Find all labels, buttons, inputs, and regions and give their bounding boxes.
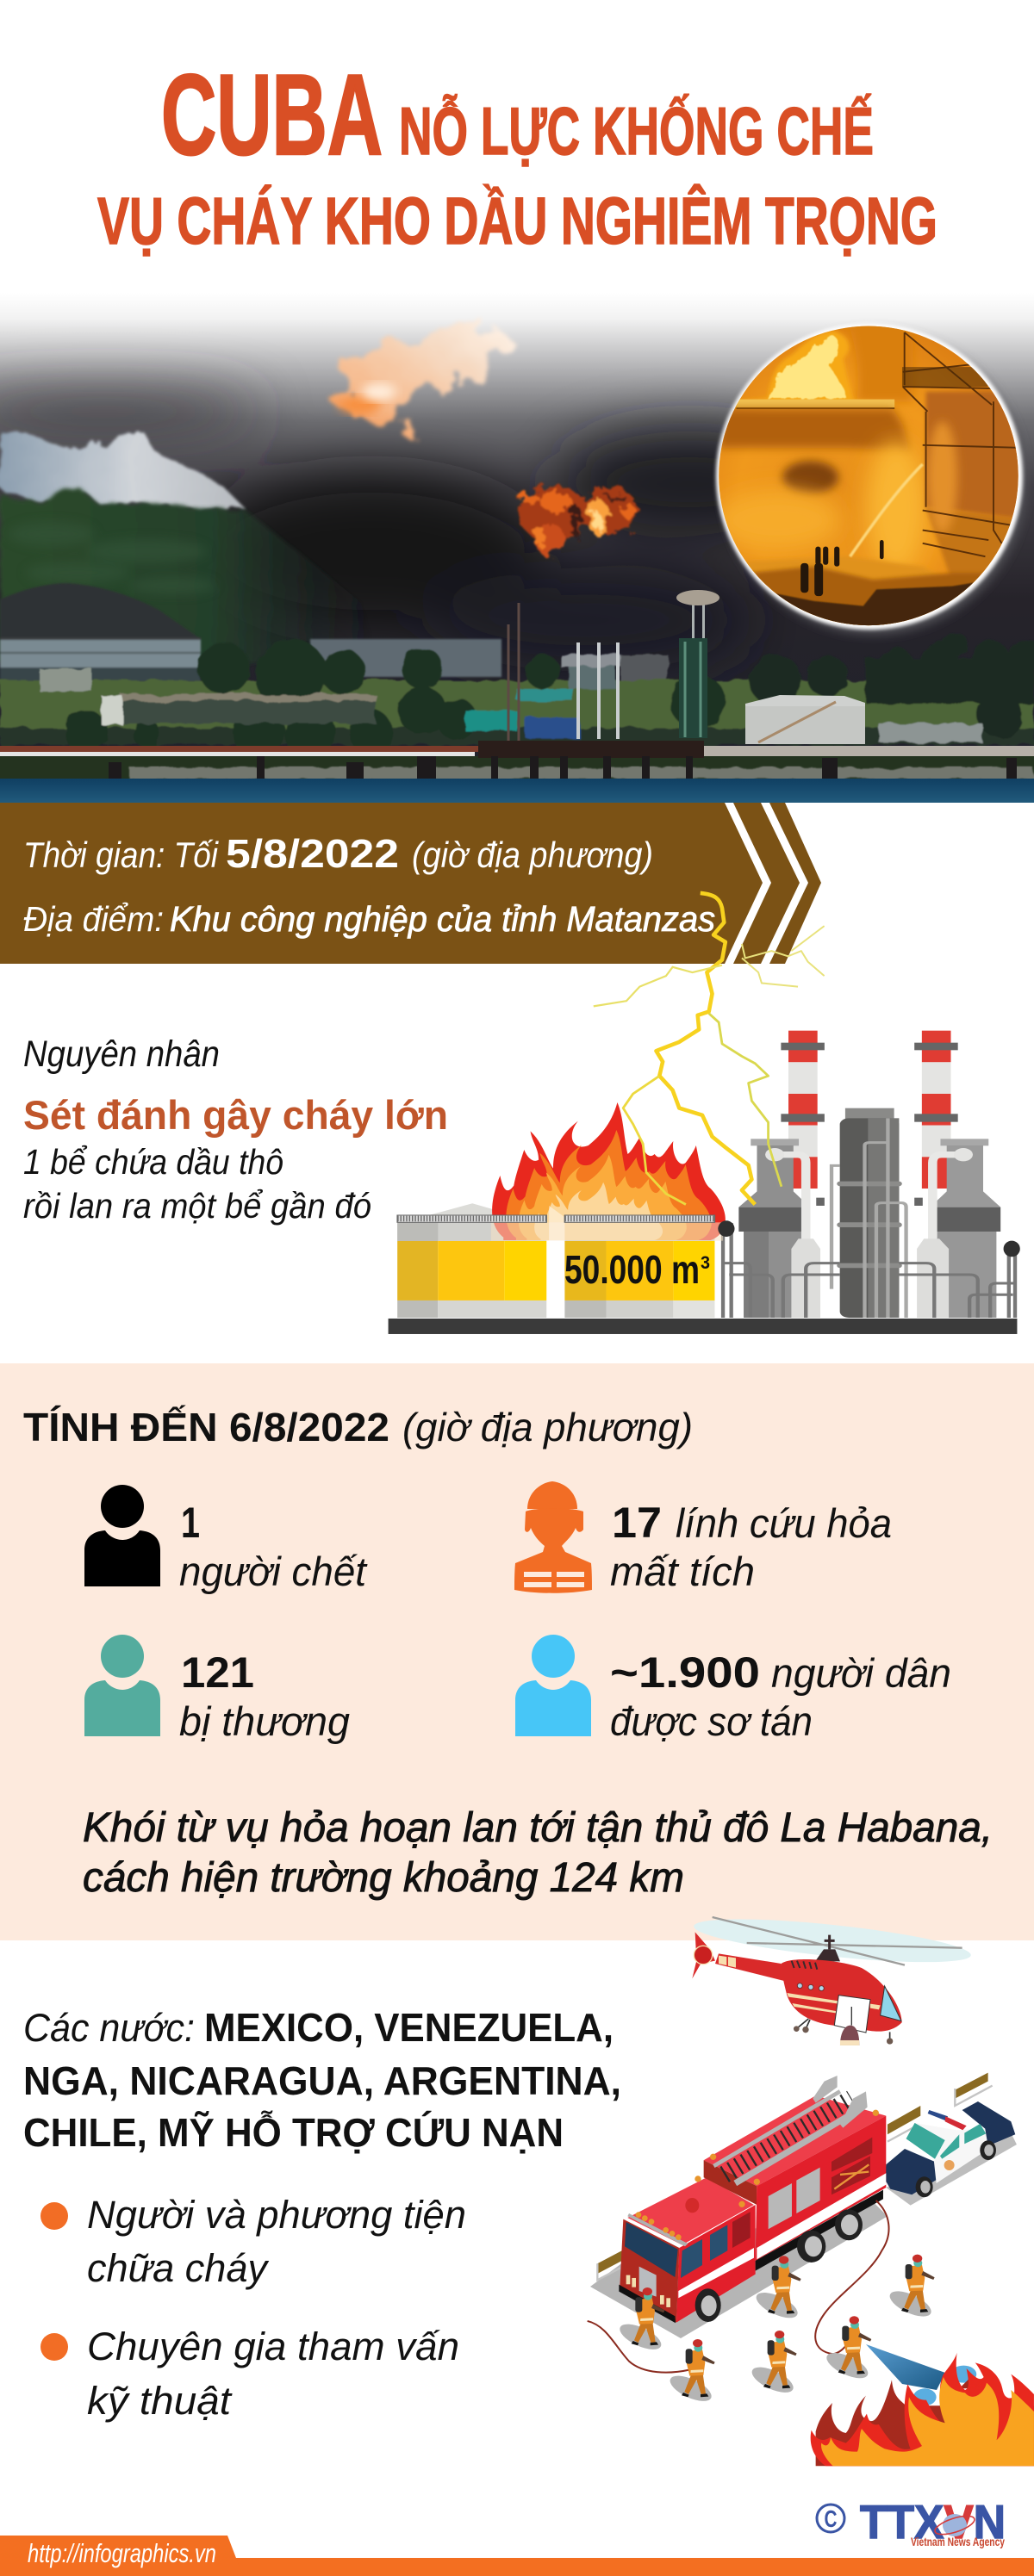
bullet: people and vehicles	[40, 2193, 466, 2290]
cause text: Nguyên nhân	[23, 1034, 220, 1075]
footer bar with url: http://infographics.vn	[28, 2538, 216, 2568]
beacon and lamps	[685, 2198, 699, 2213]
title	[97, 52, 937, 258]
icon: firefighter orange	[514, 1481, 592, 1593]
smoke note: cách hiện trường khoảng 124 km	[83, 1855, 684, 1901]
band: time and place	[0, 803, 821, 964]
forested hill	[0, 485, 315, 664]
back wall	[310, 639, 501, 677]
flames	[491, 1102, 726, 1241]
stat: 1 dead: người chết	[179, 1549, 368, 1594]
mast	[508, 603, 519, 741]
stat: 121 injured: bị thương	[179, 1698, 350, 1744]
tank railings	[397, 1215, 714, 1222]
bullet: people and vehicles: chữa cháy	[87, 2246, 269, 2290]
agency wordmark: TTXVN	[860, 2495, 1006, 2548]
stat: 121 injured	[179, 1648, 350, 1744]
bullet: people and vehicles: Người và phương tiện	[87, 2193, 466, 2237]
stat: 1900 evacuated: được sơ tán	[610, 1698, 813, 1744]
footer bar with url	[0, 2536, 1034, 2576]
title: CUBA	[161, 52, 383, 179]
illustration: helicopter	[692, 1910, 973, 2045]
circular inset photo: burning tank with firefighters	[715, 313, 1031, 634]
cause text	[23, 1034, 448, 1226]
dome tank	[0, 583, 201, 682]
copyright mark: C	[824, 2505, 838, 2532]
water tower	[676, 590, 719, 738]
white pipes and bases	[765, 1148, 973, 1318]
cause text: Sét đánh gây cháy lớn	[23, 1092, 448, 1138]
bullet: technical experts: kỹ thuật	[87, 2379, 234, 2423]
heading: supporting countries: Các nước:	[23, 2006, 195, 2050]
time line: (giờ địa phương)	[412, 835, 653, 875]
place line: Khu công nghiệp của tỉnh Matanzas	[170, 899, 715, 939]
smoke note	[83, 1805, 993, 1901]
stat: 17 firefighters missing: lính cứu hỏa	[676, 1500, 892, 1546]
left vessel	[738, 1139, 810, 1318]
valve balls	[718, 1220, 1020, 1257]
right vessel	[930, 1139, 1000, 1318]
illustration: refinery, tanks, flames	[389, 1031, 1020, 1334]
box body	[704, 2095, 886, 2186]
stat: 17 firefighters missing: mất tích	[610, 1549, 755, 1594]
cause text: rồi lan ra một bể gần đó	[23, 1186, 371, 1226]
smoke note: Khói từ vụ hỏa hoạn lan tới tận thủ đô La Habana,	[83, 1805, 993, 1851]
ground slab	[389, 1319, 1017, 1334]
chimneys	[781, 1031, 958, 1206]
wheels	[695, 2209, 863, 2322]
stat: 121 injured: 121	[181, 1648, 254, 1697]
water jet	[850, 464, 923, 556]
small pipework	[723, 1223, 1015, 1318]
smoke mass	[0, 393, 819, 672]
ground	[744, 557, 973, 625]
illustration: fire truck	[590, 2076, 888, 2338]
water jet	[866, 2344, 945, 2390]
heading: (giờ địa phương)	[402, 1405, 693, 1449]
cab	[627, 2177, 754, 2245]
stat: 1900 evacuated: ~1.900	[610, 1648, 760, 1697]
tank wall	[719, 409, 909, 451]
fireball: upper	[327, 326, 517, 428]
tank right	[564, 1222, 714, 1318]
icon: person teal	[84, 1635, 160, 1736]
hoses	[588, 2200, 889, 2373]
bullet: technical experts: Chuyên gia tham vấn	[87, 2325, 459, 2368]
cause text: 1 bể chứa dầu thô	[23, 1142, 283, 1182]
firefighters	[800, 540, 884, 596]
time line	[23, 831, 653, 876]
bright sky at left	[0, 431, 245, 508]
sea	[0, 779, 1034, 803]
pier and pipes	[0, 741, 1034, 781]
tank capacity label: 3	[701, 1253, 710, 1273]
fireball: lower	[519, 486, 638, 556]
heading: TÍNH ĐẾN 6/8/2022	[23, 1405, 389, 1449]
photo: oil depot fire at Matanzas	[0, 293, 1034, 803]
bullet list	[40, 2193, 466, 2423]
central column	[832, 1108, 906, 1318]
tank capacity label: 50.000 m	[564, 1247, 700, 1292]
heading	[23, 1405, 693, 1449]
icon: person blue	[515, 1635, 591, 1736]
tank left	[397, 1203, 546, 1318]
lightning bolts	[594, 893, 825, 1204]
heading: supporting countries: MEXICO, VENEZUELA,	[204, 2005, 614, 2050]
stat: 17 firefighters missing: 17	[612, 1499, 662, 1547]
heading: supporting countries: CHILE, MỸ HỖ TRỢ CỨU NẠN	[23, 2110, 564, 2155]
firefighters	[616, 2255, 935, 2406]
heading: supporting countries: NGA, NICARAGUA, ARGENTINA,	[23, 2058, 621, 2103]
flames: bottom right	[811, 2353, 1034, 2466]
logo: TTXVN	[817, 2495, 1006, 2548]
white storage tank	[745, 695, 865, 744]
time line: 5/8/2022	[226, 831, 399, 876]
ladder	[713, 2091, 863, 2183]
time line: Thời gian: Tối	[23, 835, 219, 875]
stat: 17 firefighters missing	[610, 1499, 892, 1594]
ground and vegetation	[0, 634, 1034, 746]
heading: supporting countries	[23, 2005, 621, 2155]
flame over tank	[836, 326, 918, 404]
right tank	[926, 392, 1028, 520]
stat: 1900 evacuated: người dân	[771, 1650, 951, 1696]
rocks	[0, 756, 1034, 780]
stat: 1900 evacuated	[610, 1648, 951, 1744]
loading arms	[578, 642, 618, 739]
panel: casualties as of 6/8/2022	[0, 1363, 1034, 1940]
stat: 1 dead: 1	[181, 1499, 200, 1547]
bullet: technical experts	[40, 2325, 459, 2423]
copyright mark	[817, 2505, 844, 2532]
chevron arrows	[725, 803, 808, 964]
place line: Địa điểm:	[23, 899, 164, 939]
icon: person black	[84, 1485, 160, 1586]
stat: 1 dead	[179, 1499, 368, 1594]
illustration: police car	[885, 2073, 1017, 2206]
